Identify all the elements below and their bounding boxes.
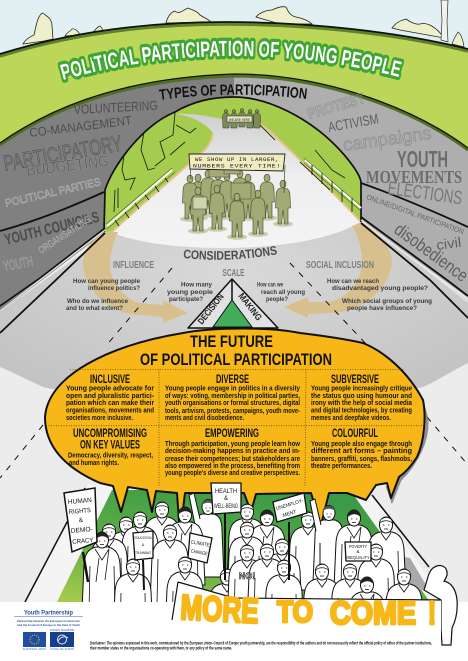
Council of Europe logo	[50, 629, 74, 651]
types of participation words: right: PROTEST	[305, 90, 367, 123]
scale question right	[257, 282, 305, 303]
types of participation words: left	[2, 98, 158, 274]
bubble heading: OF POLITICAL PARTICIPATION	[140, 350, 332, 369]
right rails	[361, 217, 468, 318]
social inclusion questions	[327, 278, 432, 312]
dashed guide lines	[0, 263, 468, 478]
road	[112, 114, 361, 250]
diverse cell: of ways: voting, membership in political parties,	[165, 393, 300, 400]
more to come banner: MORE	[180, 588, 260, 631]
youth partnership logo block	[14, 610, 83, 627]
disclaimer	[90, 640, 432, 650]
sign: health and well-being	[211, 483, 241, 580]
social inclusion questions: How can we reach	[327, 278, 379, 285]
types of participation words: left: YOUTH	[2, 253, 34, 274]
types of participation words: right: civil	[435, 234, 462, 253]
scale question right: How can we	[257, 282, 283, 288]
sign: human rights: RIGHTS	[69, 507, 92, 516]
Council of Europe logo: CONSEIL DE L'EUROPE	[50, 648, 74, 651]
speech bubble shadow	[363, 345, 427, 500]
grey shadow beside crowd	[392, 555, 429, 590]
social inclusion questions: Which social groups of young	[342, 298, 432, 305]
uncompromising cell: UNCOMPROMISING	[73, 426, 147, 440]
scale question right: people?	[266, 296, 288, 303]
influence questions	[66, 278, 140, 312]
types of participation words: left: BUDGETING	[25, 153, 110, 180]
more to come banner: TO	[277, 594, 313, 629]
colourful cell: COLOURFUL	[332, 426, 378, 440]
inclusive cell: open and pluralistic partici-	[66, 393, 155, 400]
empowering cell	[165, 426, 301, 477]
green crowd backdrop	[57, 490, 430, 602]
colourful cell: different art forms – painting	[311, 448, 412, 455]
NO slogan on shirt: NO!	[239, 571, 255, 581]
uncompromising cell: and human rights.	[69, 460, 119, 467]
wall: left dark grey	[0, 74, 234, 312]
scale question left: participate?	[169, 296, 203, 303]
sign: climate change	[188, 533, 212, 563]
sign: poverty and inequality: POVERTY	[349, 544, 367, 549]
social inclusion questions: disadvantaged young people?	[332, 285, 428, 292]
subversive cell	[311, 372, 412, 422]
right fence	[304, 158, 361, 212]
subversive cell: the status quo using humour and	[311, 393, 412, 400]
scale question left: How many	[181, 282, 212, 288]
wall: right light grey	[234, 74, 468, 298]
influence label: INFLUENCE	[113, 260, 154, 271]
crowd of marchers	[180, 166, 293, 240]
sign: unemployment: MENT	[282, 509, 297, 519]
backdrop edges	[25, 488, 429, 602]
influence questions: influence politics?	[88, 285, 140, 292]
background sky	[0, 0, 468, 70]
colourful cell: Young people also engage through	[311, 441, 412, 448]
disclaimer: their member states or the organisations co-operating with them, or any policy of the same name.	[90, 646, 232, 650]
title banner: POLITICAL PARTICIPATION OF YOUNG PEOPLE	[58, 37, 404, 83]
more to come banner	[172, 582, 441, 640]
left fence	[106, 168, 175, 229]
scale question right: reach all young	[261, 289, 305, 296]
sign: education and training: TRAINING	[135, 550, 151, 555]
colourful cell: theatre performances.	[311, 463, 372, 470]
Council of Europe logo: COUNCIL OF EUROPE	[50, 629, 74, 632]
diverse cell	[165, 372, 301, 422]
types of participation words: left: POLITICAL PARTIES	[4, 176, 102, 210]
sign: poverty and inequality: &	[356, 549, 360, 554]
inclusive cell: organisations, movements and	[66, 408, 154, 414]
sign: health and well-being: &	[224, 496, 228, 502]
sign: education and training	[133, 531, 153, 590]
considerations heading	[184, 246, 277, 260]
arch opening with green banks	[104, 97, 361, 232]
EU flag logo	[23, 632, 46, 651]
scale label: SCALE	[222, 268, 245, 279]
types of participation words: right	[305, 90, 468, 286]
ground base	[0, 150, 468, 605]
bridge top edge	[0, 22, 468, 56]
empowering cell: also empowered in the process, benefiting from	[165, 463, 300, 470]
youth partnership logo block: Partnership between the European Commission	[17, 619, 80, 623]
bridge green span	[0, 23, 468, 170]
scale question left: young people	[167, 289, 213, 296]
sign: poverty and inequality: INEQUALITY	[346, 555, 370, 560]
inclusive cell: pation which can make their	[66, 400, 154, 407]
sign: human rights: CRACY	[72, 537, 94, 546]
distant marchers with banner	[222, 109, 260, 128]
types of participation words: left: CO-MANAGEMENT	[29, 113, 133, 140]
wall top edge	[0, 74, 468, 150]
sign: human rights: &	[78, 517, 84, 524]
empowering cell: decision-making happens in practice and in-	[165, 448, 301, 455]
crowd of young people	[82, 493, 424, 655]
subversive cell: and digital technologies, by creating	[311, 408, 412, 414]
sign: health and well-being: WELL-BEING	[214, 504, 238, 510]
decision making triangle	[188, 279, 278, 328]
types of participation heading: TYPES OF PARTICIPATION	[158, 84, 307, 100]
bank cracks	[114, 113, 345, 212]
trees and chimney on the horizon	[23, 0, 464, 47]
types of participation words: left: YOUTH COUNCILS	[3, 209, 101, 249]
sign: human rights	[64, 488, 97, 582]
diverse cell: youth organisations or formal structures, digital	[165, 400, 300, 407]
bubble dotted grid	[46, 370, 423, 487]
empowering cell: Through participation, young people learn how	[165, 441, 300, 448]
subversive cell: irony with the help of social media	[311, 400, 412, 407]
subversive cell: Young people increasingly critique	[311, 386, 412, 392]
social inclusion label: SOCIAL INCLUSION	[306, 260, 374, 271]
left rails	[0, 228, 105, 333]
tan arrow: social inclusion	[284, 222, 392, 318]
types of participation words: left: VOLUNTEERING	[73, 98, 158, 117]
bubble heading: THE FUTURE	[190, 332, 273, 351]
sign: unemployment: UNEMPLOY-	[275, 498, 304, 512]
types of participation words: left: PARTICIPATORY	[2, 130, 124, 176]
inclusive cell	[66, 372, 155, 422]
influence questions: and to what extent?	[66, 305, 123, 312]
crowd banner with slogan	[189, 154, 285, 193]
EU flag logo: EUROPEAN UNION	[23, 648, 46, 651]
more to come banner: COME	[330, 595, 416, 631]
sign: education and training: &	[142, 542, 145, 547]
decision making triangle: DECISION	[196, 292, 226, 326]
social inclusion questions: people have influence?	[347, 305, 417, 312]
sign: health and well-being: HEALTH	[215, 489, 237, 495]
diverse cell: Young people engage in politics in a diversity	[165, 386, 300, 392]
sign: climate change: CLIMATE	[190, 539, 211, 549]
colourful cell	[311, 426, 412, 470]
sign: unemployment	[273, 493, 307, 580]
youth partnership logo block: Youth Partnership	[24, 610, 73, 616]
inclusive cell: INCLUSIVE	[90, 372, 130, 386]
youth partnership logo block: and the Council of Europe in the field of Youth	[17, 623, 80, 627]
uncompromising cell: ON KEY VALUES	[80, 438, 140, 452]
influence questions: How can young people	[73, 278, 140, 285]
colourful cell: banners, graffiti, songs, flashmobs,	[311, 456, 412, 463]
man holding banner	[424, 566, 457, 645]
sign: education and training: EDUCATION	[134, 535, 152, 540]
influence questions: Who do we influence	[67, 298, 128, 305]
empowering cell: crease their competences; but stakeholders are	[165, 456, 300, 463]
sign: climate change: CHANGE	[190, 549, 209, 558]
sign: poverty and inequality	[345, 542, 371, 561]
empowering cell: young people's diverse and creative perspectives.	[165, 470, 300, 477]
scale question left	[167, 282, 213, 303]
crowd banner with slogan: WE SHOW UP IN LARGER,	[195, 156, 279, 163]
uncompromising cell: Democracy, diversity, respect,	[68, 452, 153, 460]
diverse cell: ments and civil disobedience.	[165, 415, 244, 422]
types of participation words: right: campaigns	[342, 123, 433, 155]
tan arrow: influence	[83, 232, 188, 323]
crowd banner with slogan: NUMBERS EVERY TIME!	[193, 162, 281, 170]
crowd backdrop triangle	[25, 484, 445, 602]
decision making triangle: MAKING	[236, 291, 264, 322]
sign: human rights: DEMO-	[71, 526, 93, 535]
subversive cell: memes and deepfake videos.	[311, 415, 391, 422]
road tan edge	[112, 123, 361, 232]
diverse cell: DIVERSE	[216, 372, 249, 386]
white footer area	[0, 602, 468, 661]
more to come banner: !	[428, 595, 436, 631]
uncompromising cell	[68, 426, 153, 467]
considerations grey ground	[0, 222, 468, 430]
wall divider lines	[0, 183, 468, 231]
inclusive cell: societies more inclusive.	[66, 415, 133, 422]
sign: human rights: HUMAN	[68, 497, 92, 506]
inclusive cell: Young people advocate for	[66, 386, 154, 392]
considerations heading: CONSIDERATIONS	[184, 246, 277, 260]
types of participation words: left: ORGANISATIONS	[37, 214, 93, 257]
empowering cell: EMPOWERING	[205, 426, 259, 440]
distant marchers with banner: WE ARE HERE	[229, 117, 250, 122]
subversive cell: SUBVERSIVE	[331, 372, 379, 386]
future of participation speech bubble	[45, 328, 425, 535]
types of participation words: right: ACTIVISM	[327, 110, 380, 135]
bubble heading	[140, 332, 332, 369]
diverse cell: tools, artivism, protests, campaigns, youth move-	[165, 408, 301, 415]
arch outline	[104, 97, 361, 232]
